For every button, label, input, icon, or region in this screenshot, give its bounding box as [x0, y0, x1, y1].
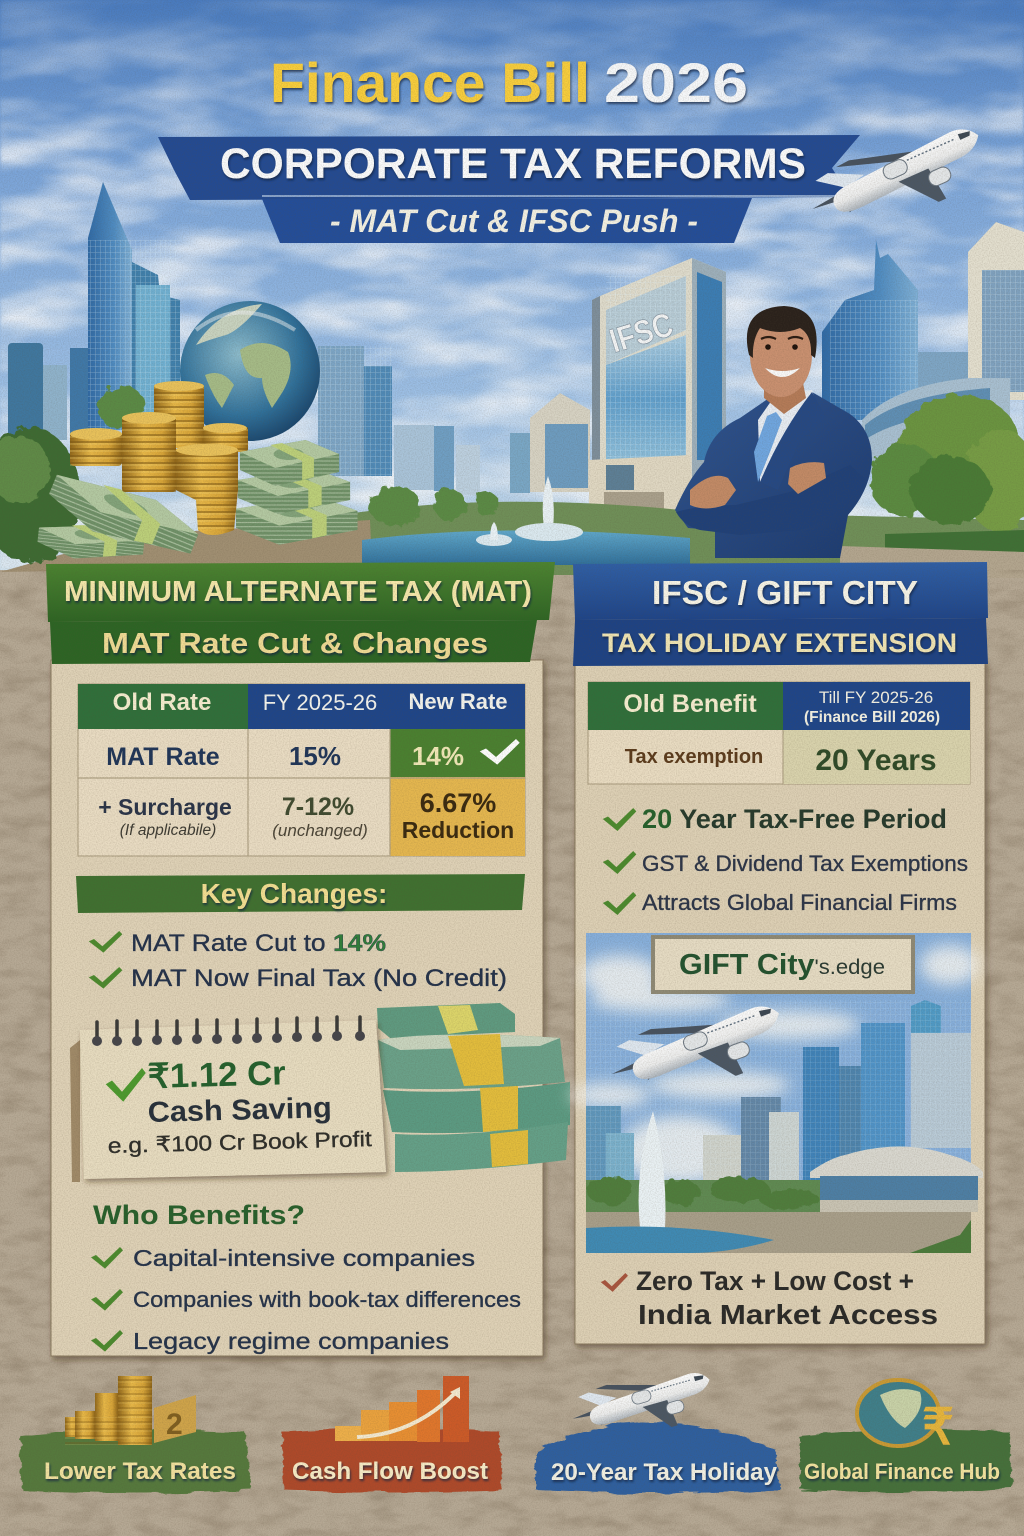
- zero tax statement: Zero Tax + Low Cost +: [636, 1266, 914, 1296]
- MAT rate table: (If applicabile): [120, 822, 216, 839]
- footer: cash flow boost: [282, 1376, 502, 1492]
- IFSC header: [573, 562, 988, 620]
- lower background texture: [0, 570, 1024, 1536]
- city skyline right: [510, 222, 1024, 493]
- footer: 20-year tax holiday: [536, 1357, 780, 1493]
- IFSC benefit table: (Finance Bill 2026): [804, 709, 940, 726]
- key changes bar: [76, 874, 525, 913]
- MAT rate table: [78, 684, 525, 856]
- fountain pool: [362, 476, 690, 565]
- cash saving note: e.g. ₹100 Cr Book Profit: [108, 1127, 372, 1158]
- who benefits: Companies with book-tax differences: [133, 1287, 521, 1312]
- IFSC benefit list: Attracts Global Financial Firms: [642, 890, 957, 915]
- key changes list: [89, 930, 507, 992]
- MAT rate table: FY 2025-26: [263, 690, 377, 715]
- sub banner: [262, 198, 752, 243]
- footer: lower tax rates: [20, 1376, 252, 1493]
- main ribbon banner: CORPORATE TAX REFORMS: [220, 140, 806, 188]
- IFSC subheader: TAX HOLIDAY EXTENSION: [602, 628, 957, 658]
- IFSC benefit list: [603, 804, 968, 915]
- who benefits: Legacy regime companies: [133, 1328, 449, 1354]
- footer: 20-year tax holiday: 20-Year Tax Holiday: [551, 1459, 778, 1486]
- key changes bar: Key Changes:: [201, 878, 387, 909]
- GIFT city edge sign: GIFT City 's.edge: [679, 949, 885, 981]
- cash saving note: [70, 1017, 386, 1182]
- MAT rate table: Reduction: [402, 817, 514, 843]
- zero tax statement: [601, 1266, 938, 1330]
- ground and park: [0, 386, 1024, 578]
- MAT rate table: MAT Rate: [106, 743, 220, 771]
- city skyline left: [8, 182, 480, 495]
- MAT rate table: Old Rate: [113, 689, 211, 716]
- IFSC benefit table: Till FY 2025-26: [819, 688, 933, 707]
- IFSC header: IFSC / GIFT CITY: [652, 574, 918, 611]
- MAT rate table: (unchanged): [272, 821, 368, 840]
- sky scene: [0, 0, 1024, 570]
- MAT rate table: 15%: [289, 741, 341, 771]
- main ribbon banner: [158, 135, 860, 200]
- businessman: [675, 306, 872, 558]
- panel: IFSC right: [570, 562, 988, 1344]
- title: [270, 51, 748, 114]
- footer: cash flow boost: Cash Flow Boost: [292, 1458, 488, 1485]
- IFSC benefit list: 20 Year Tax-Free Period: [642, 804, 947, 834]
- gold coin stacks: [70, 381, 248, 535]
- MAT rate table: + Surcharge: [98, 794, 232, 820]
- cash bundles: [36, 440, 358, 569]
- footer: lower tax rates: Lower Tax Rates: [44, 1458, 236, 1485]
- IFSC benefit list: GST & Dividend Tax Exemptions: [642, 851, 968, 876]
- zero tax statement: India Market Access: [638, 1299, 938, 1330]
- footer: global finance hub: ₹: [922, 1399, 954, 1455]
- sub banner: - MAT Cut & IFSC Push -: [330, 203, 698, 239]
- IFSC tower: IFSC: [605, 306, 678, 361]
- IFSC subheader: [573, 618, 988, 666]
- key changes list: MAT Rate Cut to 14%: [131, 930, 386, 957]
- MAT rate table: New Rate: [408, 689, 508, 714]
- footer: lower tax rates: 2: [166, 1408, 183, 1441]
- cash saving cash stack: [377, 1003, 570, 1172]
- MAT subheader: MAT Rate Cut & Changes: [102, 628, 488, 660]
- footer: global finance hub: Global Finance Hub: [804, 1459, 1000, 1484]
- IFSC benefit table: Old Benefit: [623, 690, 757, 718]
- MAT rate table: 6.67%: [420, 788, 496, 818]
- who benefits: Who Benefits?: [93, 1200, 305, 1230]
- MAT header: MINIMUM ALTERNATE TAX (MAT): [64, 576, 532, 608]
- icon: airplane top: [800, 108, 997, 250]
- IFSC benefit table: [588, 682, 970, 784]
- key changes list: MAT Now Final Tax (No Credit): [131, 965, 507, 992]
- IFSC tower: [589, 258, 726, 516]
- title: 2026: [604, 51, 748, 114]
- GIFT city edge sign: [653, 937, 913, 992]
- GIFT city illustration: [570, 933, 983, 1253]
- title: Finance Bill: [270, 51, 590, 114]
- panel: MAT left: [46, 562, 570, 1356]
- MAT header: [46, 562, 555, 622]
- cash saving note: Cash Saving: [147, 1092, 332, 1129]
- panel body: [51, 660, 543, 1356]
- who benefits: Capital-intensive companies: [133, 1245, 475, 1271]
- who benefits: [91, 1200, 521, 1354]
- MAT rate table: 14%: [412, 741, 464, 771]
- panel body: [575, 660, 985, 1344]
- MAT subheader: [50, 620, 537, 664]
- IFSC benefit table: 20 Years: [815, 744, 937, 777]
- IFSC benefit table: Tax exemption: [625, 746, 763, 768]
- globe: [180, 301, 320, 441]
- cash saving note: ₹1.12 Cr: [147, 1054, 286, 1096]
- MAT rate table: 7-12%: [282, 793, 354, 821]
- footer: global finance hub: [800, 1380, 1012, 1492]
